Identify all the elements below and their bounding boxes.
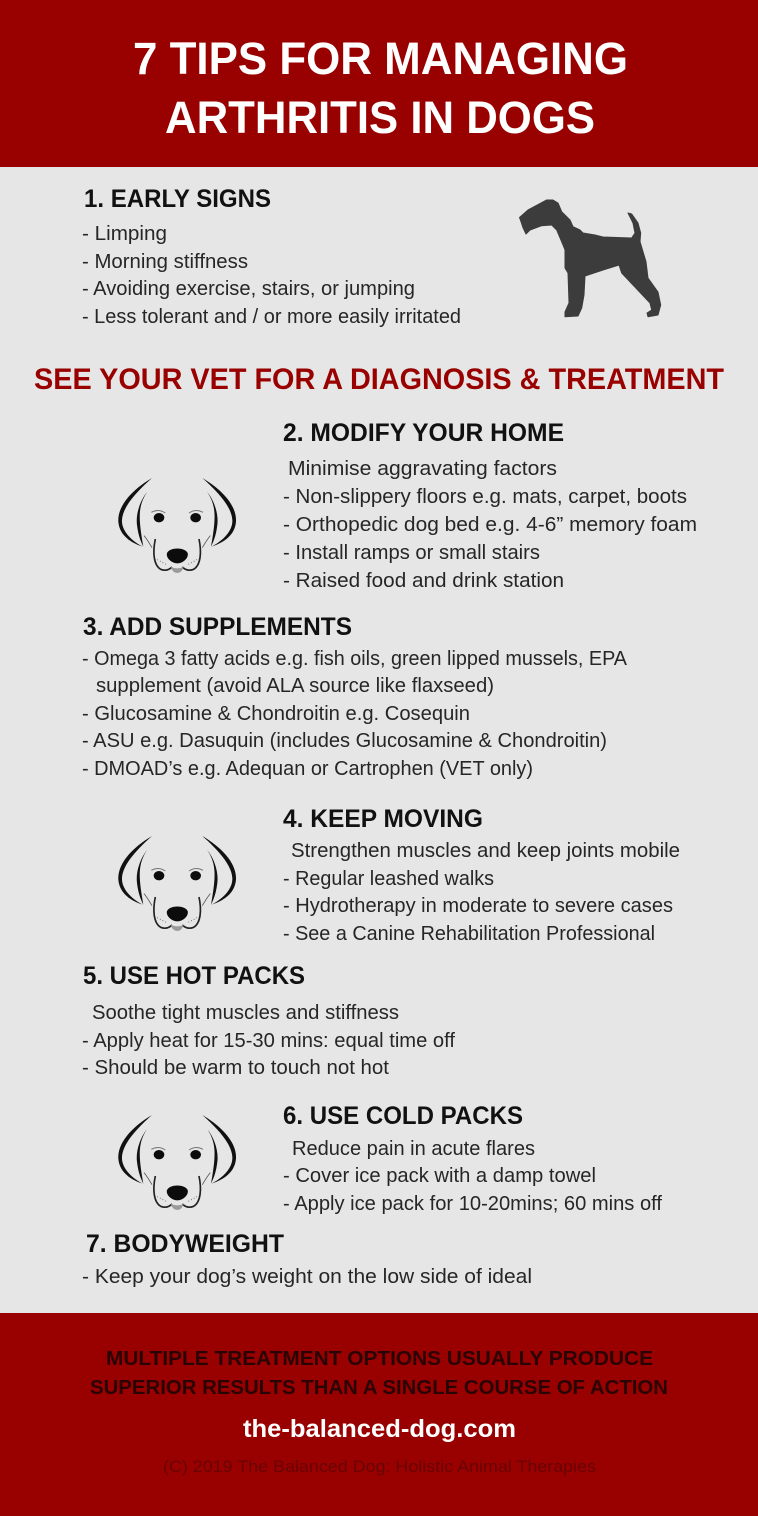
header band with title	[0, 0, 758, 167]
panel: tip 6 use cold packs: Reduce pain in acute flares	[292, 1138, 535, 1160]
panel: tip 3 add supplements: supplement (avoid ALA source like flaxseed)	[96, 675, 494, 697]
panel: tip 3 add supplements: 3. ADD SUPPLEMENTS	[83, 613, 352, 641]
icon: dog face 1	[118, 478, 236, 573]
panel: tip 2 modify your home: Minimise aggravating factors	[288, 458, 557, 480]
panel: tip 3 add supplements: - DMOAD’s e.g. Adequan or Cartrophen (VET only)	[82, 758, 533, 780]
panel: tip 2 modify your home: - Install ramps or small stairs	[283, 542, 540, 564]
panel: tip 1 early signs: - Less tolerant and / or more easily irritated	[82, 306, 461, 328]
panel: tip 5 use hot packs: - Apply heat for 15-30 mins: equal time off	[82, 1030, 455, 1052]
header band with title: ARTHRITIS IN DOGS	[165, 92, 595, 143]
icon: dog face 2	[118, 836, 236, 931]
panel: tip 4 keep moving: - See a Canine Rehabilitation Professional	[283, 923, 655, 945]
panel: tip 5 use hot packs: - Should be warm to touch not hot	[82, 1057, 389, 1079]
panel: tip 7 bodyweight: - Keep your dog’s weight on the low side of ideal	[82, 1266, 532, 1288]
copyright: (C) 2019 The Balanced Dog: Holistic Animal Therapies	[163, 1457, 596, 1476]
footer message: MULTIPLE TREATMENT OPTIONS USUALLY PRODUCE	[106, 1348, 653, 1370]
panel: tip 6 use cold packs: - Apply ice pack for 10-20mins; 60 mins off	[283, 1193, 662, 1215]
panel: tip 2 modify your home: - Raised food and drink station	[283, 570, 564, 592]
panel: tip 2 modify your home: - Non-slippery floors e.g. mats, carpet, boots	[283, 486, 687, 508]
panel: tip 5 use hot packs: 5. USE HOT PACKS	[83, 962, 305, 990]
panel: tip 1 early signs	[82, 185, 461, 328]
panel: tip 7 bodyweight	[82, 1230, 532, 1288]
panel: tip 3 add supplements: - Glucosamine & Chondroitin e.g. Cosequin	[82, 703, 470, 725]
panel: tip 3 add supplements	[82, 613, 628, 780]
website: the-balanced-dog.com	[243, 1415, 516, 1443]
panel: tip 6 use cold packs	[283, 1102, 662, 1215]
panel: tip 1 early signs: 1. EARLY SIGNS	[84, 185, 271, 213]
panel: tip 1 early signs: - Morning stiffness	[82, 251, 248, 273]
panel: tip 4 keep moving	[283, 805, 680, 945]
panel: tip 2 modify your home	[283, 419, 697, 592]
icon: dog face 3	[118, 1115, 236, 1210]
panel: tip 2 modify your home: - Orthopedic dog bed e.g. 4-6” memory foam	[283, 514, 697, 536]
panel: tip 4 keep moving: Strengthen muscles and keep joints mobile	[291, 840, 680, 862]
footer message	[90, 1348, 668, 1399]
panel: tip 4 keep moving: - Regular leashed walks	[283, 868, 494, 890]
panel: tip 3 add supplements: - Omega 3 fatty acids e.g. fish oils, green lipped mussels, EPA	[82, 648, 628, 670]
header band with title: 7 TIPS FOR MANAGING	[133, 33, 628, 84]
panel: tip 4 keep moving: 4. KEEP MOVING	[283, 805, 483, 833]
callout: see your vet: SEE YOUR VET FOR A DIAGNOSIS & TREATMENT	[34, 363, 724, 396]
panel: tip 7 bodyweight: 7. BODYWEIGHT	[86, 1230, 284, 1258]
panel: tip 5 use hot packs	[82, 962, 455, 1079]
panel: tip 4 keep moving: - Hydrotherapy in moderate to severe cases	[283, 895, 673, 917]
footer band	[0, 1313, 758, 1516]
icon: dog silhouette	[520, 200, 661, 317]
panel: tip 1 early signs: - Limping	[82, 223, 167, 245]
footer message: SUPERIOR RESULTS THAN A SINGLE COURSE OF ACTION	[90, 1377, 668, 1399]
panel: tip 2 modify your home: 2. MODIFY YOUR HOME	[283, 419, 564, 447]
panel: tip 1 early signs: - Avoiding exercise, stairs, or jumping	[82, 278, 415, 300]
panel: tip 6 use cold packs: - Cover ice pack with a damp towel	[283, 1165, 596, 1187]
panel: tip 3 add supplements: - ASU e.g. Dasuquin (includes Glucosamine & Chondroitin)	[82, 730, 607, 752]
panel: tip 6 use cold packs: 6. USE COLD PACKS	[283, 1102, 523, 1130]
panel: tip 5 use hot packs: Soothe tight muscles and stiffness	[92, 1002, 399, 1024]
